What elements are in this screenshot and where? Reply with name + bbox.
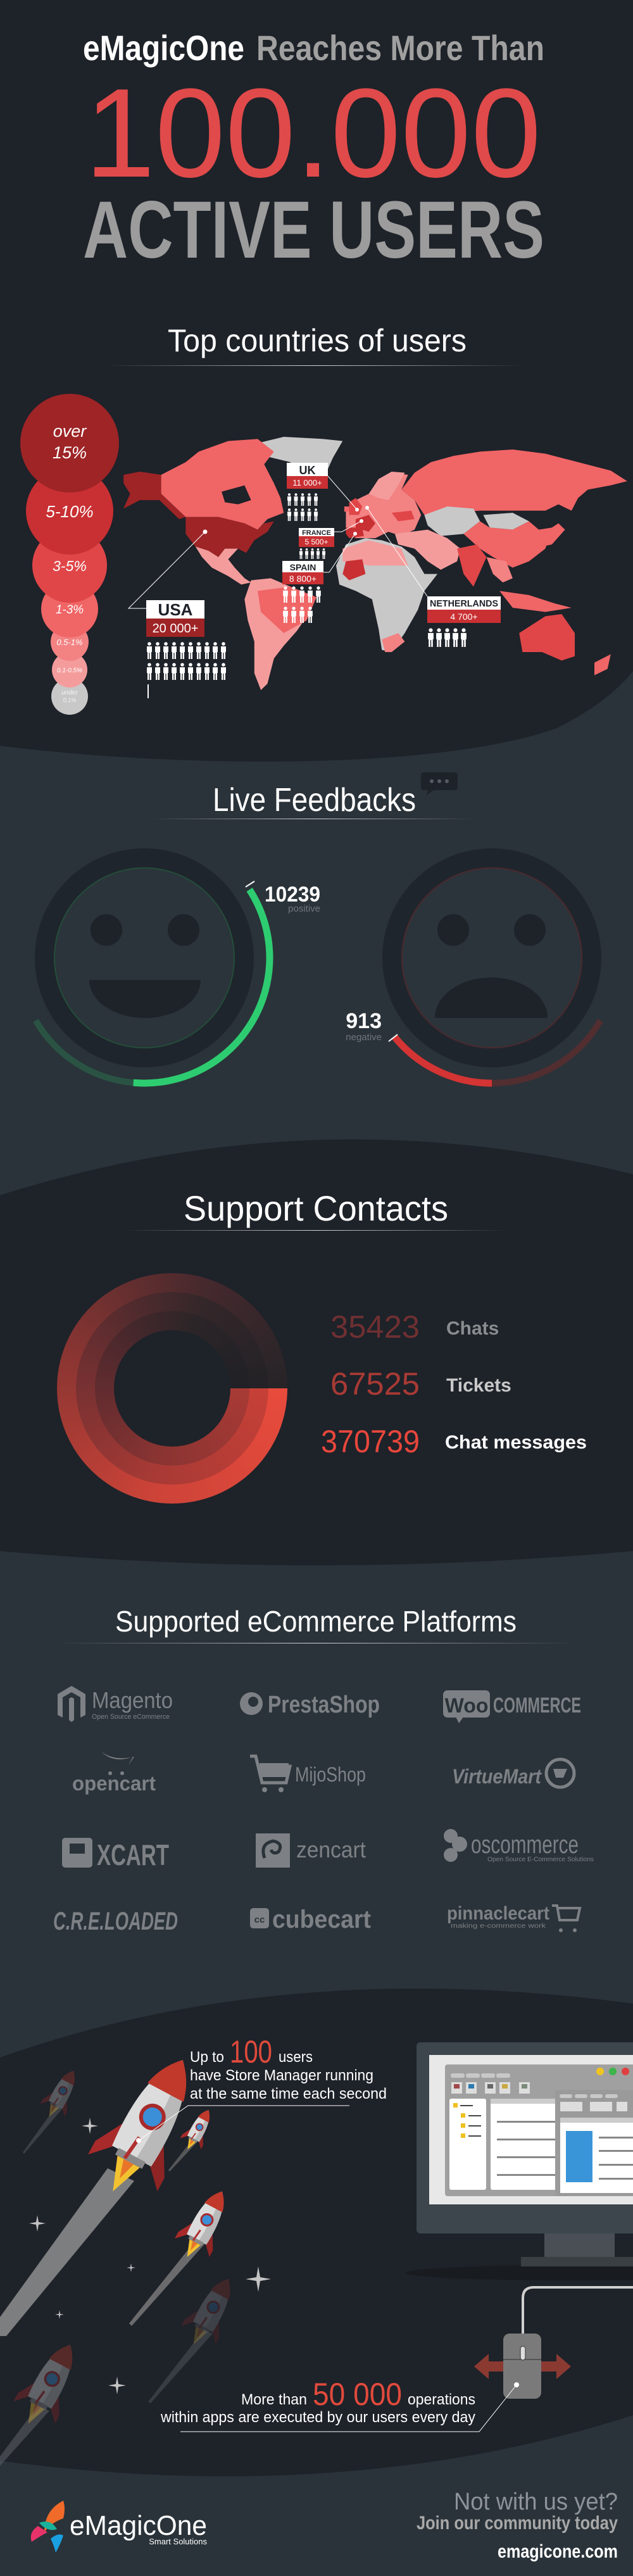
logo: zencart xyxy=(256,1833,366,1868)
support stats list: Chats xyxy=(446,1318,499,1339)
platform logos grid xyxy=(53,1686,594,1935)
label: 10239 positive: positive xyxy=(288,903,320,914)
callout: Spain xyxy=(282,561,323,623)
heading: Top countries of users: Top countries of users xyxy=(168,323,467,358)
legend: share circles: 5-10% xyxy=(46,502,94,521)
support stats list: 35423 xyxy=(330,1309,420,1345)
logo: WooCommerce: Woo xyxy=(445,1694,488,1717)
legend: share circles xyxy=(20,394,119,715)
title line: eMagicOne Reaches More Than: Reaches More Than xyxy=(256,28,544,68)
logo: VirtueMart: VirtueMart xyxy=(452,1765,542,1788)
support stats list: 67525 xyxy=(330,1366,420,1402)
logo: Magento: Magento xyxy=(92,1687,173,1713)
logo: MijoShop: MijoShop xyxy=(295,1763,366,1786)
logo: opencart: opencart xyxy=(72,1772,156,1795)
label: 913 negative: 913 xyxy=(346,1009,382,1033)
footer logo: eMagicOne: Smart Solutions xyxy=(149,2537,207,2546)
logo: osCommerce: oscommerce xyxy=(471,1831,579,1859)
callout: Spain: 8 800+ xyxy=(289,574,316,584)
callout: 50 000 operations xyxy=(160,2377,519,2432)
legend: share circles: over xyxy=(53,422,87,441)
logo: WooCommerce xyxy=(443,1690,581,1723)
background: footer section xyxy=(0,2415,633,2576)
logo: MijoShop xyxy=(250,1756,366,1792)
callout: Netherlands xyxy=(427,596,501,647)
smiley: positive xyxy=(35,848,270,1083)
callout: UK: 11 000+ xyxy=(292,478,322,487)
callout: France: 5 500+ xyxy=(304,537,329,546)
legend: share circles: 0.1% xyxy=(63,697,76,703)
callout: Spain: SPAIN xyxy=(290,562,316,572)
legend: share circles: under xyxy=(61,689,78,696)
callout: 50 000 operations: within apps are executed by our users every day xyxy=(160,2409,475,2426)
heading: Supported eCommerce Platforms: Supported eCommerce Platforms xyxy=(115,1605,517,1638)
callout: up to 100 users xyxy=(136,2034,387,2143)
logo: X-Cart xyxy=(62,1838,169,1871)
logo: PrestaShop: PrestaShop xyxy=(268,1692,380,1718)
callout: Netherlands: NETHERLANDS xyxy=(430,598,498,609)
monitor illustration xyxy=(405,2042,633,2280)
logo: PrestaShop xyxy=(240,1692,380,1718)
legend: share circles: 0.5-1% xyxy=(56,638,83,647)
callout: 50 000 operations: More than xyxy=(241,2391,307,2408)
logo: Magento xyxy=(58,1686,173,1722)
logo: osCommerce xyxy=(444,1829,594,1863)
logo: CubeCart: cc xyxy=(254,1914,265,1925)
label: 913 negative: negative xyxy=(346,1032,382,1043)
heading: Live Feedbacks: Live Feedbacks xyxy=(213,782,416,819)
support stats list xyxy=(321,1309,587,1459)
label: 10239 positive: 10239 xyxy=(265,883,320,907)
callout: France: FRANCE xyxy=(302,529,331,537)
legend: share circles: 1-3% xyxy=(56,603,84,617)
callout: UK xyxy=(287,463,328,521)
title line: eMagicOne Reaches More Than xyxy=(83,28,544,68)
logo: WooCommerce: COMMERCE xyxy=(493,1693,581,1718)
callout: UK: UK xyxy=(299,464,315,477)
logo: Magento: Open Source eCommerce xyxy=(92,1713,170,1721)
logo: osCommerce: Open Source E-Commerce Solutions xyxy=(487,1856,594,1863)
logo: opencart xyxy=(72,1752,156,1795)
donut chart: support contacts xyxy=(57,1273,287,1504)
logo: X-Cart: XCART xyxy=(97,1838,169,1871)
footer logo: eMagicOne xyxy=(31,2501,207,2553)
callout: France xyxy=(299,528,334,559)
callout: USA: 20 000+ xyxy=(153,622,198,636)
mouse with arrows xyxy=(474,2287,633,2399)
support stats list: 370739 xyxy=(321,1424,420,1459)
background: platforms section xyxy=(0,1551,633,2058)
title: 100.000: 100.000 xyxy=(85,63,541,204)
logo: CubeCart: cubecart xyxy=(272,1906,371,1933)
footer call to action xyxy=(417,2489,618,2562)
callout: up to 100 users: Up to xyxy=(190,2049,224,2066)
background: feedback section xyxy=(0,671,633,1195)
callout: up to 100 users: users xyxy=(279,2049,313,2066)
logo: CRE Loaded: C.R.E.LOADED xyxy=(53,1907,178,1935)
footer call to action: Not with us yet? xyxy=(454,2489,618,2515)
footer logo: eMagicOne: eMagicOne xyxy=(70,2510,207,2541)
logo: PinnacleCart: pinnaclecart xyxy=(447,1903,549,1924)
callout: Netherlands: 4 700+ xyxy=(450,612,478,622)
smiley: negative xyxy=(382,848,601,1083)
callout: up to 100 users: at the same time each second xyxy=(190,2085,387,2102)
rockets and trails xyxy=(0,2042,246,2466)
heading: Support Contacts: Support Contacts xyxy=(184,1188,448,1228)
support stats list: Chat messages xyxy=(445,1432,587,1453)
support stats list: Tickets xyxy=(446,1375,511,1396)
logo: zencart: zencart xyxy=(296,1837,366,1863)
legend: share circles: 15% xyxy=(53,443,87,462)
logo: PinnacleCart xyxy=(447,1903,580,1932)
icon: speech bubble xyxy=(421,772,458,795)
callout: USA: USA xyxy=(158,600,193,619)
callout: up to 100 users: 100 xyxy=(230,2034,272,2070)
logo: VirtueMart xyxy=(452,1759,574,1788)
legend: share circles: 0.1-0.5% xyxy=(57,667,82,674)
callout: 50 000 operations: operations xyxy=(408,2391,475,2408)
title line: eMagicOne Reaches More Than: eMagicOne xyxy=(83,28,244,68)
callout: USA xyxy=(146,600,226,698)
legend: share circles: 3-5% xyxy=(53,558,87,574)
stars xyxy=(29,2118,271,2394)
map leader lines and dots xyxy=(128,476,427,608)
callout: 50 000 operations: 50 000 xyxy=(313,2377,402,2412)
callout: up to 100 users: have Store Manager running xyxy=(190,2067,373,2084)
world map xyxy=(123,437,627,690)
logo: PinnacleCart: making e-commerce work xyxy=(451,1923,546,1930)
